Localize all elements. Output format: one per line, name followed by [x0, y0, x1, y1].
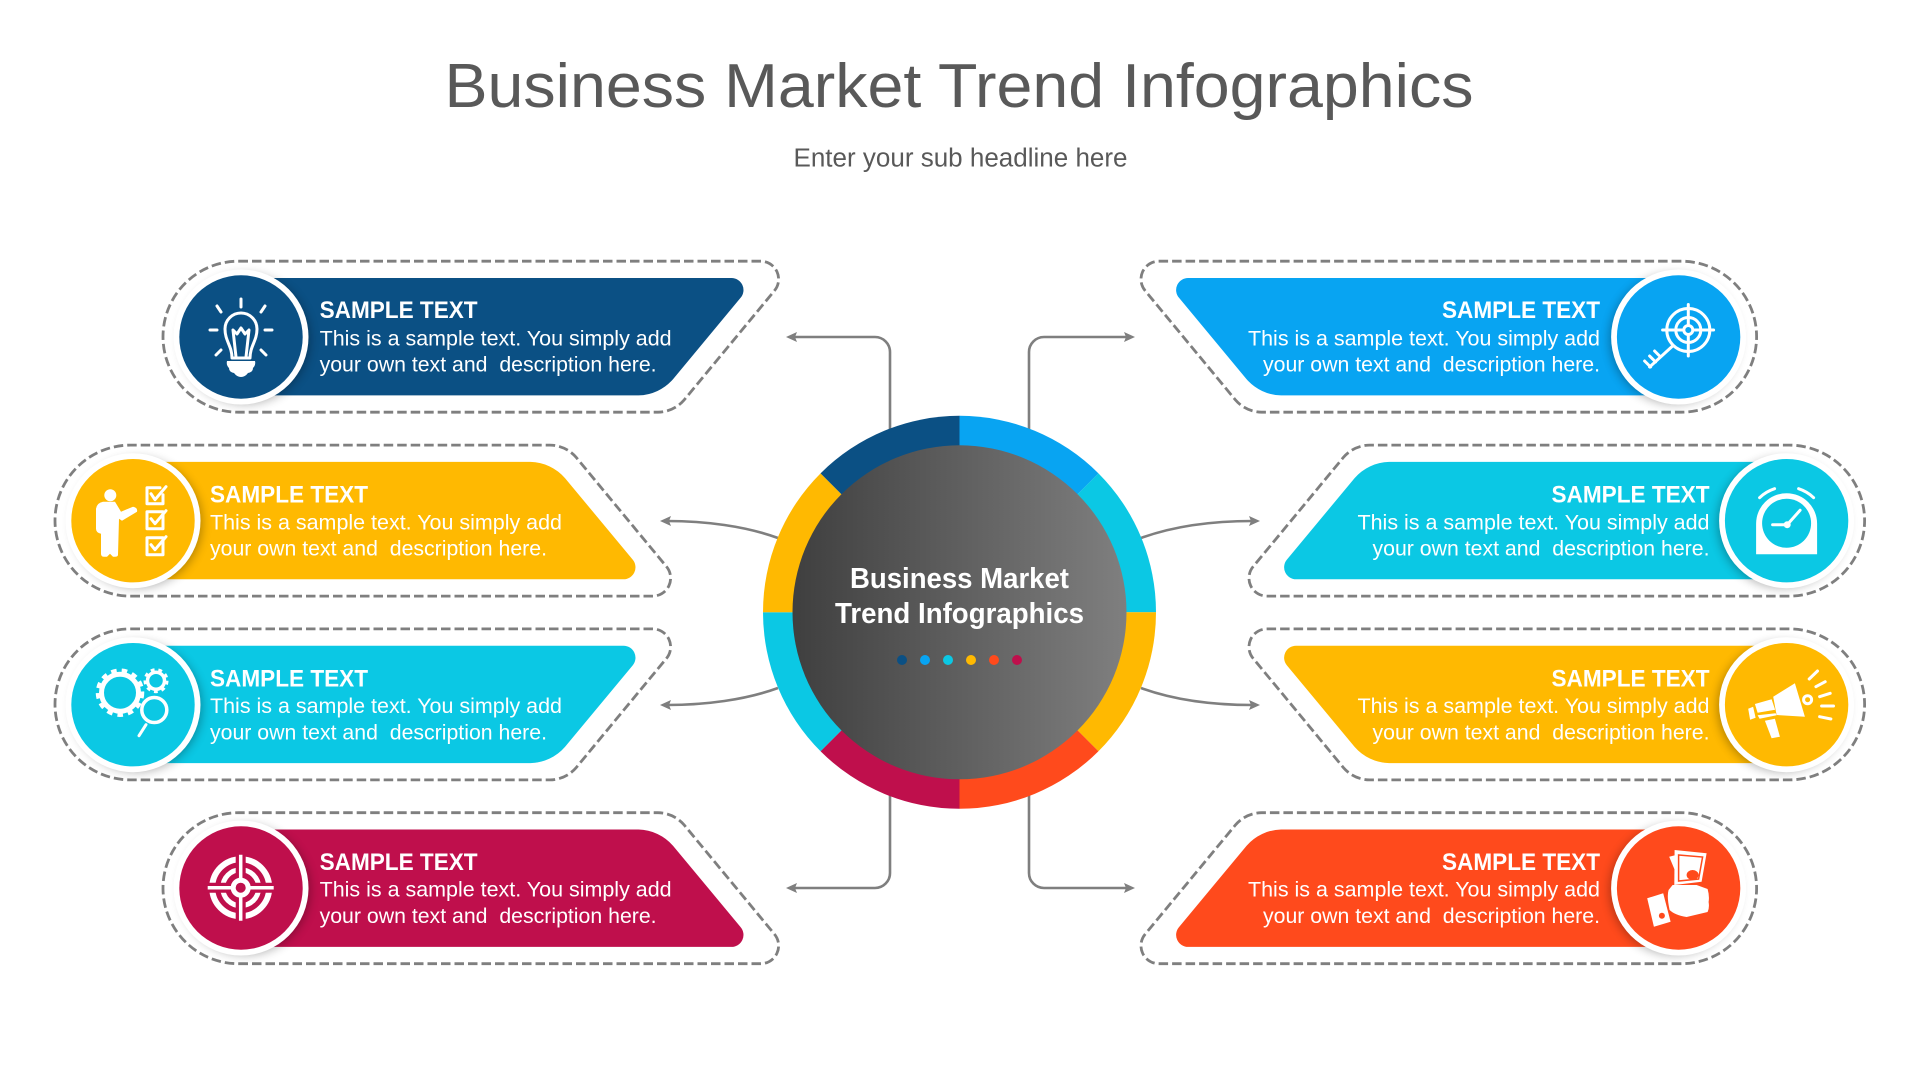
white ring	[66, 637, 200, 772]
badge	[1725, 459, 1848, 582]
icon: alarm clock	[1756, 489, 1817, 554]
ribbon	[1176, 830, 1679, 947]
badge	[1617, 826, 1740, 950]
dashed outline	[163, 813, 779, 964]
arrow: to lower-left panel	[660, 688, 778, 710]
center heading: Trend Infographics	[835, 598, 1084, 630]
center heading: Business Market	[850, 563, 1069, 595]
badge	[1725, 643, 1848, 766]
title: Business Market Trend Infographics	[444, 52, 1474, 121]
segmented colour ring	[763, 416, 1156, 809]
shadow	[1610, 825, 1740, 955]
arrow: to bottom-right panel	[1029, 792, 1135, 893]
icon: light bulb	[210, 299, 272, 377]
heading: SAMPLE TEXT	[320, 297, 478, 324]
heading: SAMPLE TEXT	[1552, 482, 1710, 508]
body text: This is a sample text. You simply add	[210, 694, 562, 718]
center heading	[835, 563, 1084, 630]
ribbon	[241, 830, 743, 947]
colour dots	[897, 655, 1022, 665]
ribbon	[241, 278, 743, 395]
body text: This is a sample text. You simply add	[210, 510, 562, 534]
arrow: to top-left panel	[786, 332, 890, 432]
icon: gears and magnifier	[98, 670, 167, 736]
white ring	[1611, 820, 1746, 956]
subtitle: Enter your sub headline here	[794, 145, 1128, 173]
body text: your own text and description here.	[1263, 904, 1600, 928]
white ring	[174, 270, 308, 404]
body text	[1358, 694, 1710, 744]
shadow	[180, 825, 310, 955]
ribbon	[133, 646, 635, 763]
panel: top-right blue	[1141, 261, 1757, 412]
arrow: to top-right panel	[1029, 332, 1135, 432]
body text	[320, 878, 672, 928]
panel: top-left dark blue	[163, 261, 779, 412]
badge	[71, 459, 195, 582]
heading: SAMPLE TEXT	[1552, 666, 1710, 692]
panel: lower-right yellow	[1249, 629, 1865, 780]
white ring	[1719, 453, 1854, 588]
shadow	[1610, 274, 1740, 404]
dashed outline	[1249, 445, 1865, 596]
heading: SAMPLE TEXT	[1442, 849, 1600, 876]
body text	[1358, 510, 1710, 561]
dashed outline	[1141, 813, 1757, 964]
panel: upper-right cyan	[1249, 445, 1865, 596]
badge	[1617, 275, 1740, 399]
body text: your own text and description here.	[1372, 537, 1710, 561]
body text	[1248, 326, 1600, 377]
panel: bottom-right red	[1141, 813, 1757, 964]
center hub	[763, 416, 1156, 809]
shadow	[1718, 458, 1848, 588]
dashed outline	[55, 629, 671, 780]
body text: This is a sample text. You simply add	[320, 326, 672, 350]
arrow: to upper-right panel	[1141, 516, 1260, 538]
dashed outline	[1249, 629, 1865, 780]
body text: your own text and description here.	[210, 537, 547, 561]
ribbon	[1284, 646, 1787, 763]
shadow	[72, 642, 202, 772]
shadow	[1718, 642, 1848, 772]
badge	[179, 826, 303, 950]
shadow	[180, 274, 310, 404]
arrow: to lower-right panel	[1141, 688, 1260, 710]
panel: lower-left cyan	[55, 629, 671, 780]
icon: hand holding money	[1647, 850, 1709, 927]
heading: SAMPLE TEXT	[210, 482, 368, 508]
ribbon	[1176, 278, 1679, 395]
ribbon	[133, 462, 635, 579]
body text	[210, 694, 562, 744]
icon: presenter with checklist	[96, 487, 166, 557]
heading: SAMPLE TEXT	[320, 849, 478, 876]
icon: key with target	[1645, 304, 1714, 367]
heading: SAMPLE TEXT	[210, 666, 368, 692]
badge	[71, 643, 195, 766]
badge	[179, 275, 303, 399]
white ring	[66, 453, 200, 588]
body text	[320, 326, 672, 377]
dashed outline	[55, 445, 671, 596]
ribbon	[1284, 462, 1787, 579]
body text: This is a sample text. You simply add	[320, 878, 672, 902]
dark gradient disc	[792, 445, 1126, 779]
arrow: to bottom-left panel	[786, 792, 890, 893]
body text: your own text and description here.	[210, 720, 547, 744]
icon: megaphone	[1748, 671, 1834, 738]
white ring	[174, 820, 308, 956]
body text: your own text and description here.	[1372, 720, 1710, 744]
body text: This is a sample text. You simply add	[1248, 326, 1600, 350]
body text	[1248, 878, 1600, 928]
connector arrows	[660, 332, 1260, 893]
body text: your own text and description here.	[320, 353, 657, 377]
body text: your own text and description here.	[1263, 353, 1600, 377]
panel: upper-left yellow	[55, 445, 671, 596]
white ring	[1611, 270, 1746, 404]
dashed outline	[1141, 261, 1757, 412]
body text: your own text and description here.	[320, 904, 657, 928]
shadow	[72, 458, 202, 588]
icon: target	[205, 852, 277, 924]
body text: This is a sample text. You simply add	[1248, 878, 1600, 902]
body text: This is a sample text. You simply add	[1358, 510, 1710, 534]
panel: bottom-left crimson	[163, 813, 779, 964]
body text	[210, 510, 562, 561]
dashed outline	[163, 261, 779, 412]
body text: This is a sample text. You simply add	[1358, 694, 1710, 718]
heading: SAMPLE TEXT	[1442, 297, 1600, 324]
white ring	[1719, 637, 1854, 772]
arrow: to upper-left panel	[660, 516, 778, 538]
